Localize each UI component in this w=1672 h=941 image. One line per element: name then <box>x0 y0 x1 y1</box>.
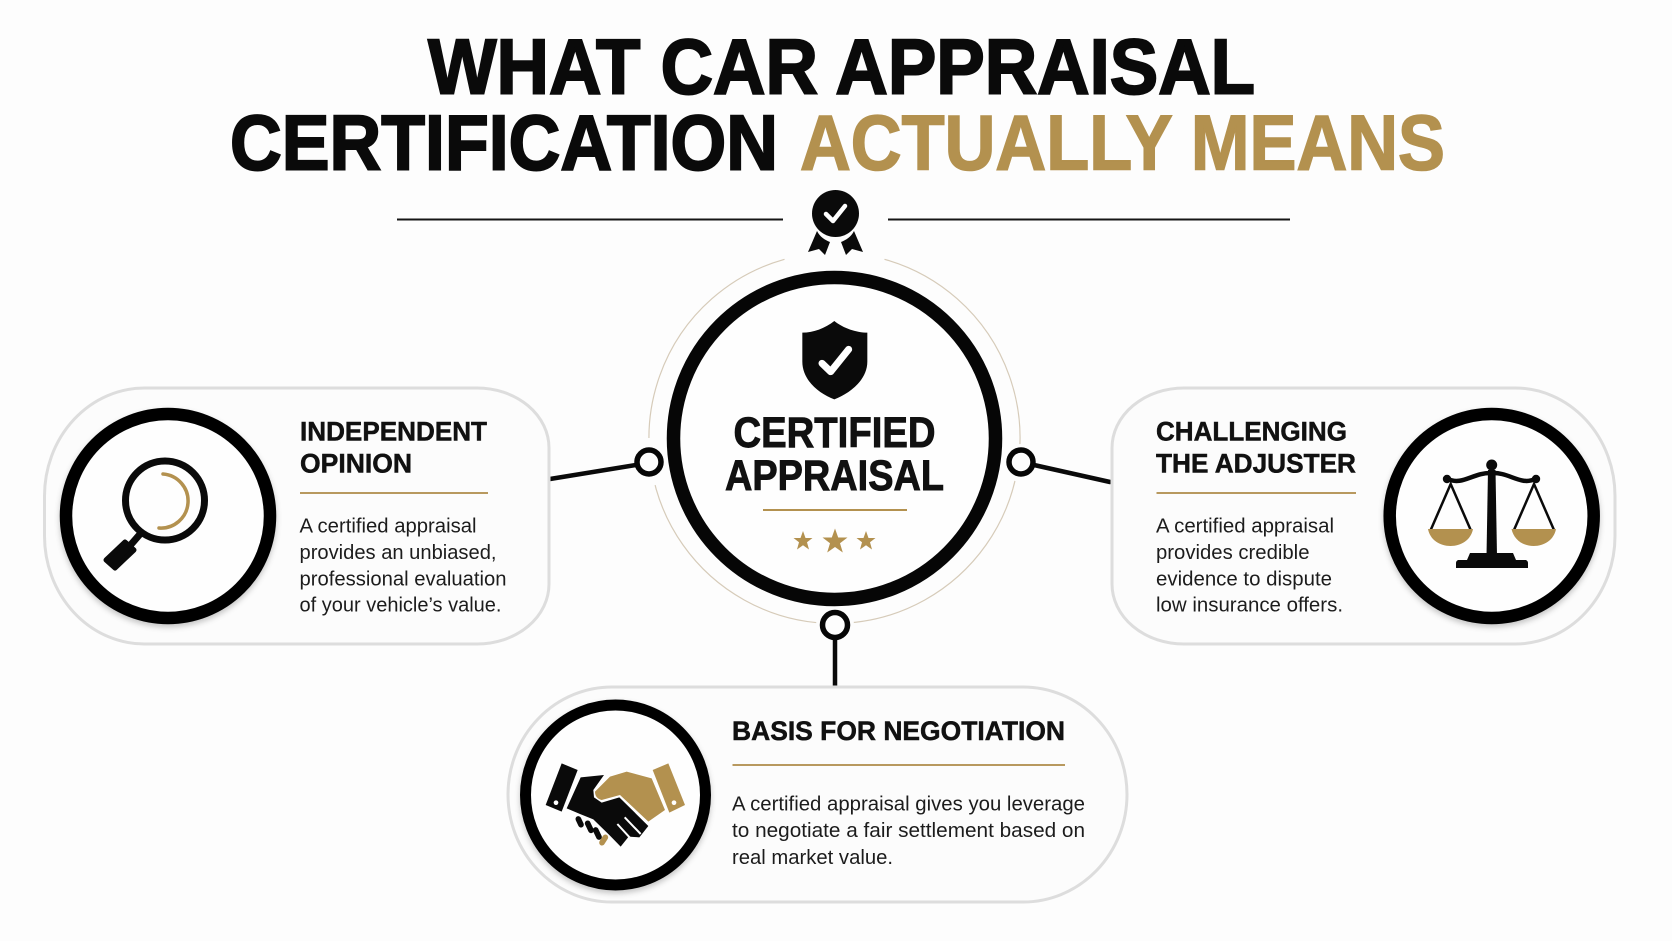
badge heading: CERTIFIED <box>734 409 936 457</box>
text: independent opinion description: provides an unbiased, <box>300 542 496 564</box>
text: basis for negotiation description: to negotiate a fair settlement based on <box>732 820 1085 842</box>
heading: challenging the adjuster: THE ADJUSTER <box>1156 448 1356 478</box>
badge heading: APPRAISAL <box>725 452 944 500</box>
heading: challenging the adjuster: CHALLENGING <box>1156 416 1347 446</box>
text: independent opinion description <box>300 516 506 616</box>
title <box>230 22 1445 186</box>
text: independent opinion description: professional evaluation <box>300 568 506 590</box>
icon: award medal <box>808 190 863 255</box>
panel: challenging the adjuster <box>1112 388 1615 644</box>
text: basis for negotiation description: real market value. <box>732 847 893 869</box>
title divider with medal <box>397 190 1290 255</box>
title: ACTUALLY MEANS <box>800 98 1445 186</box>
text: basis for negotiation description: A certified appraisal gives you leverage <box>732 794 1085 816</box>
icon: shield with check <box>802 321 867 399</box>
text: basis for negotiation description <box>732 794 1085 869</box>
outer thin ring <box>625 259 1040 644</box>
connector nodes <box>637 450 1033 638</box>
icon: three gold stars <box>794 528 876 552</box>
text: challenging the adjuster description: A certified appraisal <box>1156 516 1334 538</box>
text: challenging the adjuster description: provides credible <box>1156 542 1310 564</box>
heading: challenging the adjuster <box>1156 416 1356 478</box>
title: CERTIFICATION <box>230 98 778 186</box>
badge heading <box>725 409 944 500</box>
icon: balance scales <box>1390 414 1594 618</box>
text: challenging the adjuster description: low insurance offers. <box>1156 594 1343 616</box>
heading: independent opinion: INDEPENDENT <box>300 416 487 446</box>
text: challenging the adjuster description: evidence to dispute <box>1156 568 1332 590</box>
central badge: certified appraisal <box>674 278 996 600</box>
panel: independent opinion <box>44 388 549 644</box>
text: independent opinion description: A certified appraisal <box>300 516 476 538</box>
connector lines <box>550 465 1110 686</box>
icon: magnifying glass <box>66 414 270 618</box>
icon: handshake <box>526 705 706 885</box>
panel: basis for negotiation <box>508 687 1127 902</box>
heading: independent opinion: OPINION <box>300 448 412 478</box>
text: challenging the adjuster description <box>1156 516 1343 616</box>
text: independent opinion description: of your vehicle’s value. <box>300 594 502 616</box>
heading: independent opinion <box>300 416 487 478</box>
title: WHAT CAR APPRAISAL <box>428 22 1255 110</box>
heading: basis for negotiation: BASIS FOR NEGOTIATION <box>732 716 1065 746</box>
